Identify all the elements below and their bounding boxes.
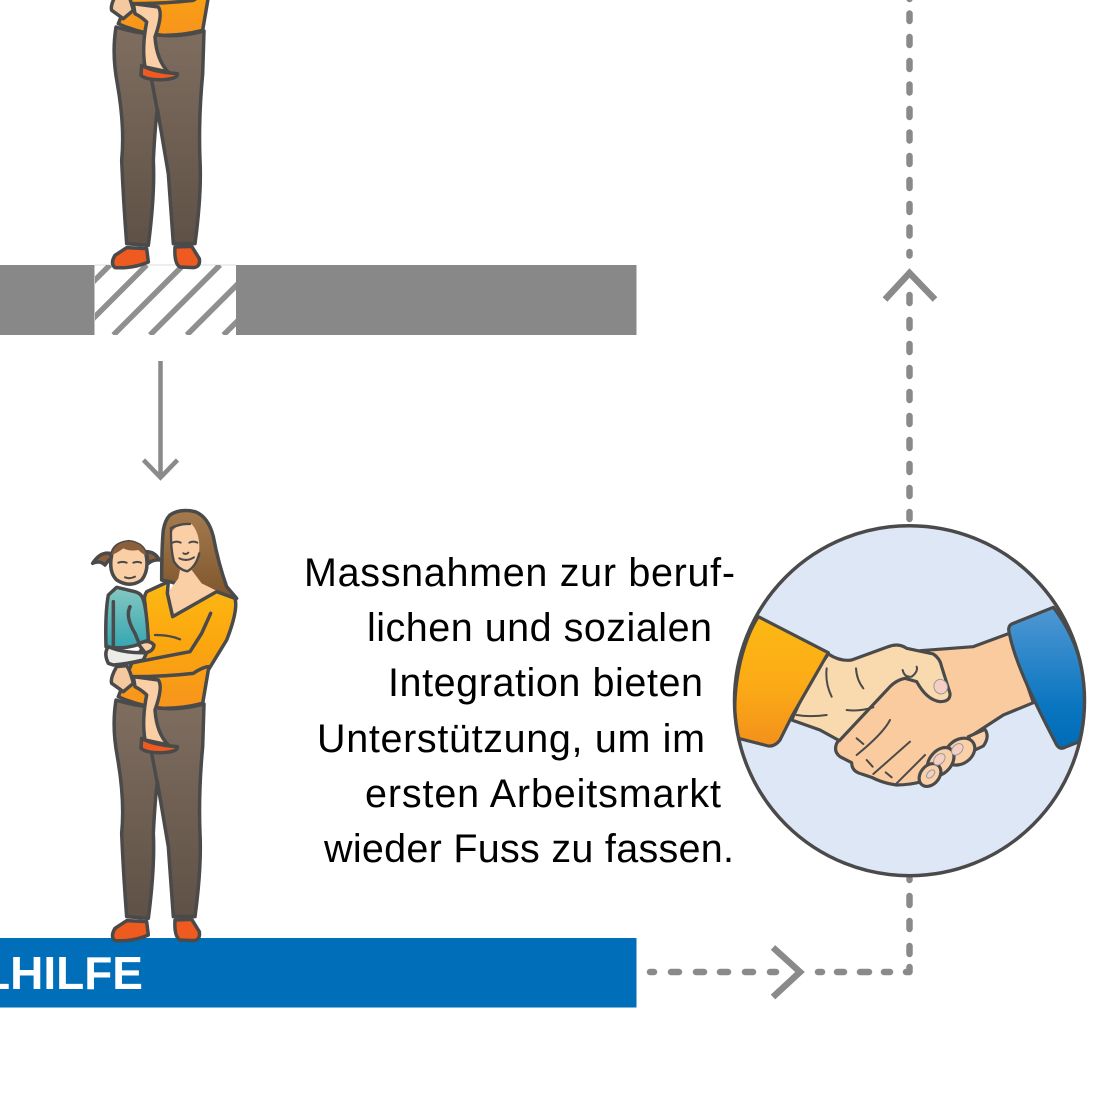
grey bar with hatched gap: [0, 265, 636, 335]
hatched gap: [95, 265, 236, 335]
dashed arrow line: vertical route from handshake to top: [885, 0, 935, 519]
right sleeve: [1009, 607, 1085, 748]
text block: integration measures: lichen und sozialen: [367, 606, 712, 650]
text block: integration measures: Massnahmen zur beruf-: [304, 551, 735, 595]
dashed arrow line: from blue bar to handshake: [650, 879, 910, 997]
text block: integration measures: wieder Fuss zu fassen.: [323, 827, 734, 871]
text block: integration measures: ersten Arbeitsmarkt: [365, 772, 721, 816]
left hand: [792, 645, 950, 741]
arrow: down from grey bar to blue bar: [144, 361, 178, 478]
left sleeve: [735, 617, 828, 746]
text block: integration measures: Integration bieten: [388, 661, 703, 705]
right hand: [836, 633, 1033, 785]
left fingers: [968, 729, 987, 750]
figure: woman with child standing on grey bar: [93, 0, 237, 268]
fingernails: [925, 677, 965, 780]
text block: integration measures: Unterstützung, um im: [317, 717, 705, 761]
blue bar with label: [0, 938, 636, 1008]
text block: integration measures: [304, 551, 735, 871]
icon: handshake in circle: [734, 526, 1085, 876]
figure: woman with child standing on blue bar: [93, 511, 237, 941]
